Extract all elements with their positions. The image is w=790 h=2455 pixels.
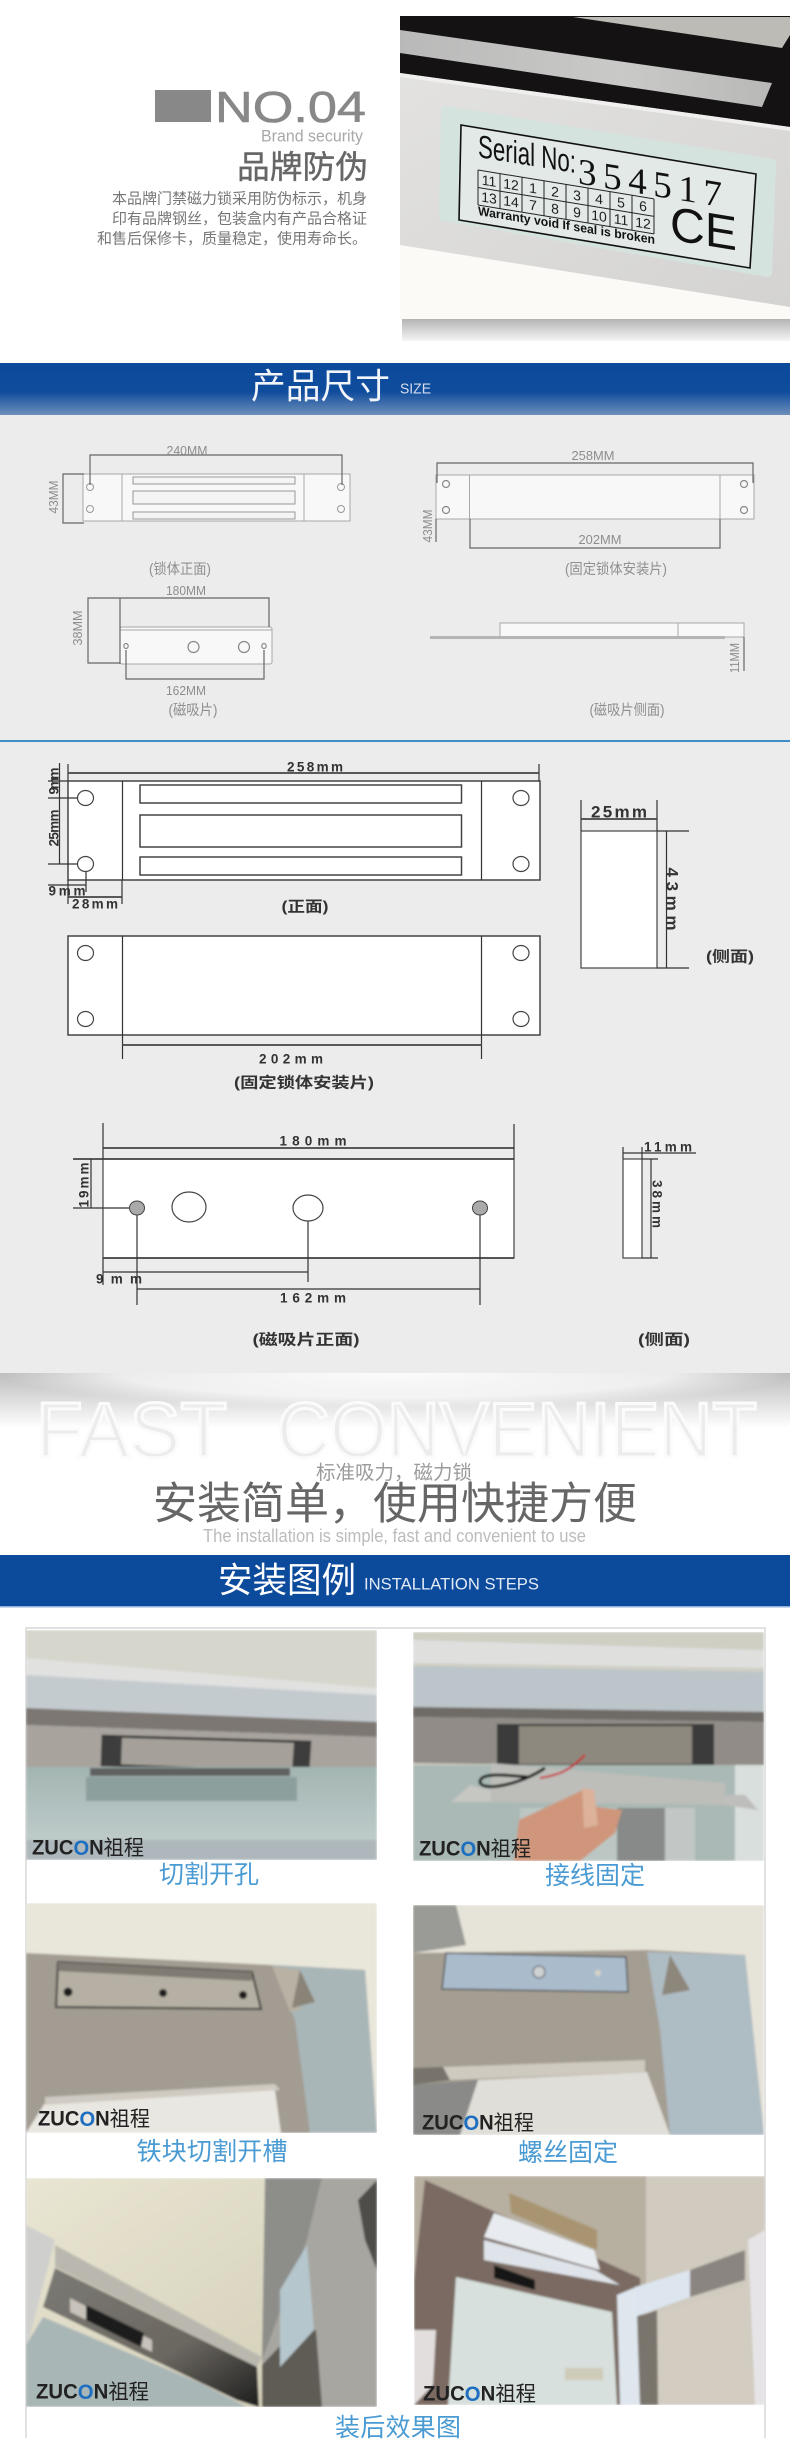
panel: fast convenient header xyxy=(0,1373,790,1555)
serial sticker: 1 xyxy=(529,179,537,197)
caption: 磁吸片正面: (磁吸片正面) xyxy=(252,1332,360,1348)
caption: 螺丝固定: 螺丝固定 xyxy=(518,2139,618,2167)
subtitle: English: The installation is simple, fast and convenient to use xyxy=(203,1526,586,1546)
serial sticker: 11 xyxy=(614,210,628,229)
serial sticker: Warranty void If seal is broken xyxy=(478,204,655,247)
logo: ZUCON step 6: ZUCON祖程 xyxy=(423,2382,536,2406)
serial sticker: 2 xyxy=(551,183,559,200)
band: 产品尺寸 SIZE: SIZE xyxy=(400,380,431,398)
diagram: lock front with dimensions: 258mm xyxy=(287,760,343,774)
diagram: lock front with dimensions: 9mm xyxy=(48,884,86,898)
photo: installed result right xyxy=(414,2176,765,2405)
diagram: lock front with dimensions: 28mm xyxy=(72,896,118,912)
diagram: armature plate (small): 38MM xyxy=(71,610,85,646)
serial sticker: 14 xyxy=(503,192,519,211)
serial sticker: 6 xyxy=(639,198,647,215)
caption: 侧面: (侧面) xyxy=(706,948,754,966)
diagram: mounting plate (small): 202MM xyxy=(578,533,622,547)
subtitle: 标准吸力，磁力锁: 标准吸力，磁力锁 xyxy=(316,1462,472,1484)
diagram: lock side with dimensions xyxy=(581,800,689,968)
title: 安装简单，使用快捷方便: 安装简单，使用快捷方便 xyxy=(153,1480,637,1528)
diagram: armature front with dimensions: 19mm xyxy=(76,1162,92,1208)
diagram: armature side with dimensions: 38mm xyxy=(650,1180,664,1228)
serial sticker: 3 xyxy=(573,187,581,204)
diagram: mounting plate (small): 43MM xyxy=(421,510,435,542)
text block: brand description: 本品牌门禁磁力锁采用防伪标示，机身 xyxy=(112,190,367,208)
divider line xyxy=(0,740,790,742)
photo: step 1 cut opening xyxy=(26,1630,377,1860)
band: 产品尺寸 SIZE xyxy=(0,363,790,415)
watermark: FAST CONVENIENT: FAST xyxy=(36,1386,227,1474)
caption: 切割开孔: 切割开孔 xyxy=(159,1861,259,1889)
diagram: armature side with dimensions: 11mm xyxy=(644,1140,692,1154)
diagram: lock side with dimensions: 43mm xyxy=(662,868,682,930)
serial sticker: 10 xyxy=(591,207,607,225)
caption: 磁吸片: (磁吸片) xyxy=(168,702,218,719)
band: 安装图例 INSTALLATION STEPS xyxy=(0,1555,790,1608)
band: 安装图例 INSTALLATION STEPS: INSTALLATION STEPS xyxy=(364,1574,539,1594)
serial sticker: 8 xyxy=(551,200,559,217)
diagram: lock body front (small): 43MM xyxy=(47,480,61,514)
heading: NO.04 xyxy=(155,83,366,132)
serial sticker: 12 xyxy=(635,214,651,232)
diagram: lock body front (small) xyxy=(47,444,350,523)
serial sticker: CE xyxy=(670,197,737,261)
diagram: armature plate (small): 180MM xyxy=(166,584,206,598)
text block: brand description: 和售后保修卡，质量稳定，使用寿命长。 xyxy=(97,230,367,248)
diagram: armature plate (small): 162MM xyxy=(166,684,206,698)
caption: 接线固定: 接线固定 xyxy=(545,1862,645,1890)
caption: 装后效果图: 装后效果图 xyxy=(335,2414,461,2442)
diagram: armature front with dimensions xyxy=(73,1123,514,1306)
logo: ZUCON step 5: ZUCON祖程 xyxy=(36,2380,149,2404)
diagram: armature front with dimensions: 162mm xyxy=(280,1290,346,1306)
diagram: mounting plate (small): 258MM xyxy=(572,449,614,463)
heading: NO.04: NO.04 xyxy=(215,83,366,132)
photo: installed result left xyxy=(26,2178,377,2407)
caption: 固定锁体安装片: (固定锁体安装片) xyxy=(565,561,667,578)
serial sticker: Serial No: xyxy=(478,128,576,180)
watermark: FAST CONVENIENT xyxy=(36,1386,757,1474)
caption: 磁吸片侧面: (磁吸片侧面) xyxy=(590,702,664,719)
logo: ZUCON step 4: ZUCON祖程 xyxy=(422,2112,534,2134)
serial sticker: 11 xyxy=(482,172,496,190)
serial sticker: 354517 xyxy=(578,152,722,216)
serial sticker: 12 xyxy=(503,175,519,194)
diagram: lock body front (small): 240MM xyxy=(166,444,208,458)
caption: 正面: (正面) xyxy=(282,898,328,916)
photo: step 2 wiring xyxy=(413,1632,764,1861)
diagram: lock side with dimensions: 25mm xyxy=(591,802,647,822)
serial sticker: 4 xyxy=(595,190,603,207)
band: 安装图例 INSTALLATION STEPS: 安装图例 xyxy=(218,1562,356,1600)
diagram: armature plate (small) xyxy=(71,584,272,698)
photo shadow xyxy=(402,319,790,341)
caption: 锁体正面: (锁体正面) xyxy=(149,561,211,578)
serial sticker xyxy=(443,110,772,273)
photo: step 4 screw fixing xyxy=(413,1905,764,2135)
diagram: mounting plate with dimensions: 202mm xyxy=(259,1052,323,1066)
serial sticker: 7 xyxy=(529,196,537,214)
diagram: lock front with dimensions: 9mm xyxy=(46,768,62,794)
serial sticker: 13 xyxy=(481,189,497,207)
panel: installation steps frame xyxy=(26,1628,765,2438)
caption: 固定锁体安装片: (固定锁体安装片) xyxy=(234,1074,374,1092)
caption: 铁块切割开槽: 铁块切割开槽 xyxy=(136,2138,288,2166)
diagram: armature side with dimensions xyxy=(623,1140,696,1258)
heading: 品牌防伪: 品牌防伪 xyxy=(237,149,368,185)
text block: brand description: 印有品牌钢丝，包装盒内有产品合格证 xyxy=(112,210,367,228)
diagram: armature front with dimensions: 180mm xyxy=(280,1134,346,1148)
watermark: FAST CONVENIENT: CONVENIENT xyxy=(277,1386,757,1474)
logo: ZUCON step 2: ZUCON祖程 xyxy=(419,1838,531,1860)
band: 产品尺寸 SIZE: 产品尺寸 xyxy=(251,368,390,406)
diagram: mounting plate (small) xyxy=(421,449,754,548)
diagram: mounting plate with dimensions xyxy=(68,936,540,1066)
subheading: Brand security: Brand security xyxy=(261,126,363,146)
diagram: armature side (small) xyxy=(430,623,744,673)
text block: brand description xyxy=(97,190,367,248)
serial sticker: 9 xyxy=(573,204,581,221)
serial sticker: 5 xyxy=(617,194,625,211)
logo: ZUCON step 3: ZUCON祖程 xyxy=(38,2108,150,2130)
diagram: lock front with dimensions: 25mm xyxy=(46,810,62,846)
diagram: lock front with dimensions xyxy=(46,760,540,912)
photo: step 3 cut slot xyxy=(26,1903,377,2133)
diagram: armature front with dimensions: 9mm xyxy=(96,1272,142,1286)
caption: 侧面: (侧面) xyxy=(638,1332,690,1348)
logo: ZUCON step 1: ZUCON祖程 xyxy=(32,1836,144,1860)
diagram: armature side (small): 11MM xyxy=(728,643,742,673)
panel: grey dimensions background xyxy=(0,415,790,1373)
photo: serial number label on lock xyxy=(400,16,790,319)
